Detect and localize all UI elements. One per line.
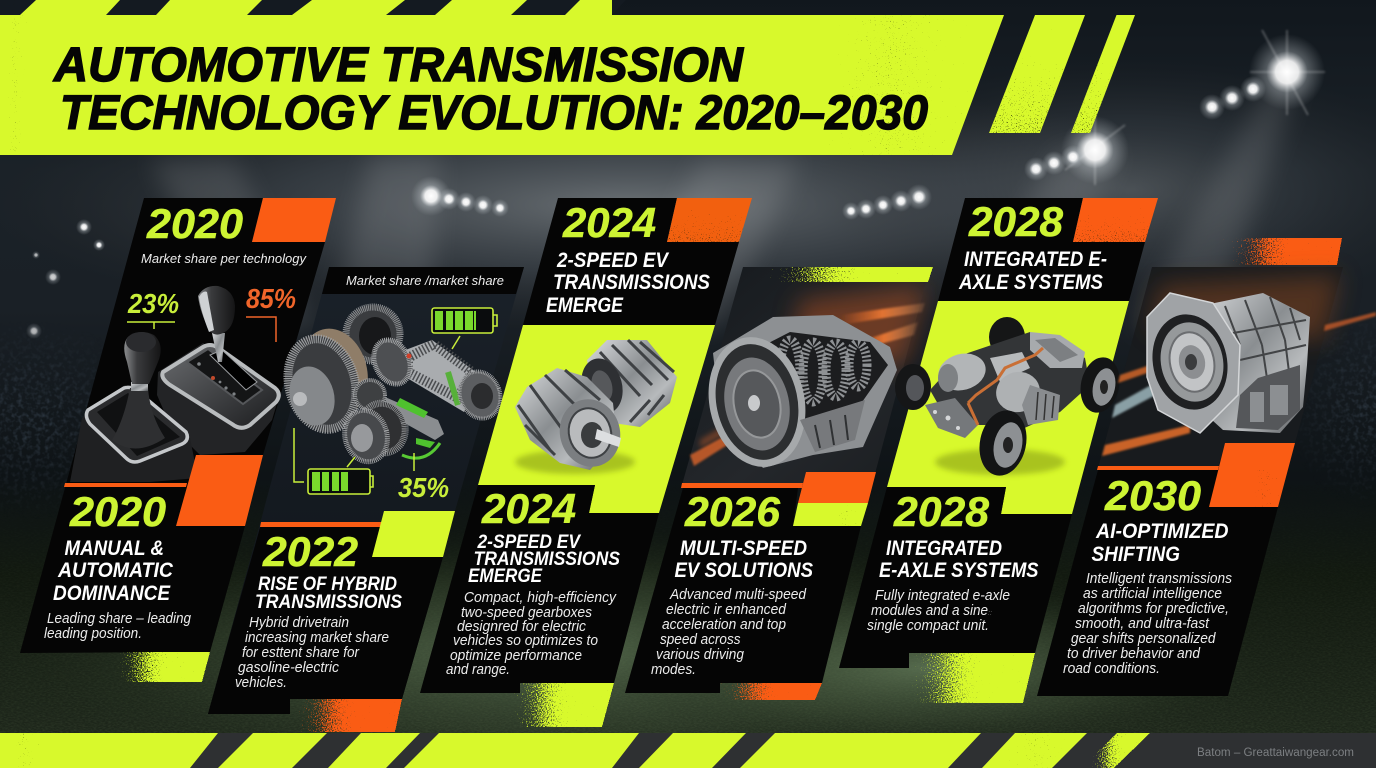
gear: front small	[339, 397, 412, 467]
body text	[651, 586, 807, 678]
heading text: TRANSMISSIONS	[474, 549, 620, 570]
automatic share callout: 85%	[246, 283, 296, 314]
rear drum	[575, 340, 677, 427]
panel: 2030 AI-optimized	[1037, 238, 1376, 696]
body text: Leading share – leading	[47, 610, 192, 627]
body text: gear shifts personalized	[1071, 630, 1216, 647]
body text: gasoline-electric	[238, 659, 339, 676]
icon: automatic gear selector	[157, 286, 280, 455]
accent: green scuff	[495, 683, 614, 727]
heading text: TRANSMISSIONS	[255, 592, 402, 613]
accent: orange block	[667, 198, 752, 242]
arrow: green rotation	[402, 443, 440, 458]
accent: green scuff	[890, 653, 1035, 703]
footer credit: Batom – Greattaiwangear.com	[1197, 747, 1354, 759]
heading text: SHIFTING	[1092, 543, 1180, 566]
heading text	[468, 532, 620, 587]
heading text	[879, 537, 1038, 582]
top heading	[546, 249, 710, 317]
title	[53, 39, 928, 140]
body text: various driving	[656, 646, 745, 663]
hybrid share callout: 35%	[398, 472, 449, 503]
heading text: MANUAL &	[64, 537, 164, 560]
top heading: INTEGRATED E-	[964, 248, 1107, 271]
body text: algorithms for predictive,	[1078, 600, 1229, 617]
body text: vehicles so optimizes to	[453, 632, 598, 649]
top year: 2028	[968, 198, 1064, 245]
heading text	[1092, 520, 1228, 566]
rear wheels	[895, 317, 1025, 410]
heading text	[255, 574, 402, 613]
heading text: INTEGRATED	[886, 537, 1002, 560]
panel: 2026 multi-speed EV	[625, 267, 933, 700]
top heading: EMERGE	[546, 294, 624, 317]
accent: orange scuff	[705, 683, 822, 700]
body text: modes.	[651, 661, 696, 678]
icon: battery high	[432, 308, 497, 349]
body text: smooth, and ultra-fast	[1075, 615, 1210, 632]
heading text	[674, 537, 813, 582]
year heading: 2022	[262, 528, 358, 575]
top heading: TRANSMISSIONS	[553, 271, 710, 294]
year heading: 2028	[893, 488, 990, 535]
body text: acceleration and top	[662, 616, 786, 633]
icon: hybrid gear set	[275, 305, 507, 467]
accent: green scuff strip	[740, 267, 933, 282]
year heading: 2020	[69, 488, 166, 535]
body text: Hybrid drivetrain	[249, 614, 349, 631]
mid divider: orange bar	[64, 483, 187, 487]
panel: 2020 manual and automatic	[20, 198, 336, 682]
panel: 2024 two-speed EV	[420, 198, 752, 727]
body text: optimize performance	[450, 647, 582, 664]
image background with light streaks	[1098, 267, 1376, 468]
divider: orange bar	[1097, 466, 1219, 470]
battery and motor modules	[925, 332, 1085, 438]
year heading: 2030	[1104, 472, 1201, 519]
hybrid share callout	[398, 453, 449, 503]
top accent: orange block	[252, 198, 336, 242]
divider: orange bar	[681, 483, 803, 488]
icon: AI-optimized transmission	[1144, 293, 1310, 433]
body text: as artificial intelligence	[1083, 585, 1222, 602]
icon: e-axle chassis	[895, 317, 1124, 480]
body text: road conditions.	[1063, 660, 1160, 677]
body text	[44, 610, 192, 642]
stadium floodlights	[26, 30, 1325, 339]
front wheels	[974, 354, 1124, 480]
body text: and range.	[446, 661, 510, 678]
manual share callout: 23%	[127, 288, 179, 319]
title: AUTOMOTIVE TRANSMISSION	[53, 39, 744, 92]
top year: 2020	[146, 200, 243, 247]
accent: orange block	[798, 472, 876, 503]
gear: small middle	[354, 379, 444, 448]
year heading: 2026	[684, 488, 781, 535]
heading text: E-AXLE SYSTEMS	[879, 559, 1038, 582]
top heading: AXLE SYSTEMS	[958, 271, 1103, 294]
accent: orange block	[1209, 443, 1295, 507]
body text: to driver behavior and	[1067, 645, 1201, 662]
body text: Intelligent transmissions	[1086, 570, 1232, 587]
caption strip: Market share /market share	[346, 273, 504, 288]
body text: ::	[988, 610, 992, 617]
accent: green scuff	[100, 652, 210, 682]
manual share callout	[127, 288, 179, 329]
front drum	[515, 368, 628, 474]
gear: rear top	[344, 305, 402, 363]
accent: orange block	[1073, 198, 1158, 242]
body text: two-speed gearboxes	[461, 604, 592, 621]
caption strip	[322, 267, 524, 294]
motor cylinder	[366, 333, 507, 424]
icon: battery low	[294, 428, 373, 494]
body text: designred for electric	[457, 618, 586, 635]
chart caption: Market share per technology	[141, 251, 307, 266]
body text: Compact, high-efficiency	[464, 589, 617, 606]
body text: single compact unit.	[867, 617, 989, 634]
icon: multi-speed cutaway transmission	[701, 315, 897, 472]
body text: speed across	[660, 631, 741, 648]
accent: green block	[793, 503, 868, 526]
accent: green block	[372, 511, 455, 557]
body text	[235, 614, 389, 691]
top heading: 2-SPEED EV	[556, 249, 670, 272]
automatic share callout	[246, 283, 296, 342]
top year: 2024	[562, 199, 656, 246]
year heading: 2024	[481, 485, 576, 532]
heading text	[53, 537, 174, 605]
body text	[446, 589, 617, 678]
top heading	[958, 248, 1107, 294]
body text: vehicles.	[235, 674, 287, 691]
body text: increasing market share	[245, 629, 389, 646]
icon: two-speed gearbox	[515, 340, 677, 474]
divider: orange bar	[260, 522, 382, 527]
title: TECHNOLOGY EVOLUTION: 2020–2030	[60, 87, 928, 140]
panel: 2028 integrated e-axle	[839, 198, 1158, 703]
body text: electric ir enhanced	[666, 601, 787, 618]
heading text: AUTOMATIC	[57, 559, 174, 582]
body text: Fully integrated e-axle	[875, 587, 1010, 604]
icon: manual gear stick	[70, 332, 198, 482]
image background with orange streaks	[682, 267, 930, 485]
footer hazard stripes	[0, 733, 1376, 768]
panel: 2022 hybrid	[208, 267, 524, 732]
body text	[1063, 570, 1232, 677]
body text: for esttent share for	[242, 644, 360, 661]
body text: Advanced multi-speed	[669, 586, 807, 603]
heading text: MULTI-SPEED	[680, 537, 807, 560]
heading text: AI-OPTIMIZED	[1095, 520, 1228, 543]
accent: orange scuff	[280, 699, 402, 732]
mid accent: orange block	[176, 455, 263, 526]
heading text: RISE OF HYBRID	[258, 574, 397, 595]
heading text: EMERGE	[468, 566, 543, 587]
heading text: EV SOLUTIONS	[674, 559, 813, 582]
header banner	[0, 0, 1135, 155]
body text: modules and a sine	[871, 602, 988, 619]
gear: large left	[275, 321, 377, 441]
heading text: 2-SPEED EV	[477, 532, 581, 553]
heading text: DOMINANCE	[53, 582, 171, 605]
orange scuff strip	[1210, 238, 1342, 265]
body text	[867, 587, 1010, 634]
body text: leading position.	[44, 625, 142, 642]
